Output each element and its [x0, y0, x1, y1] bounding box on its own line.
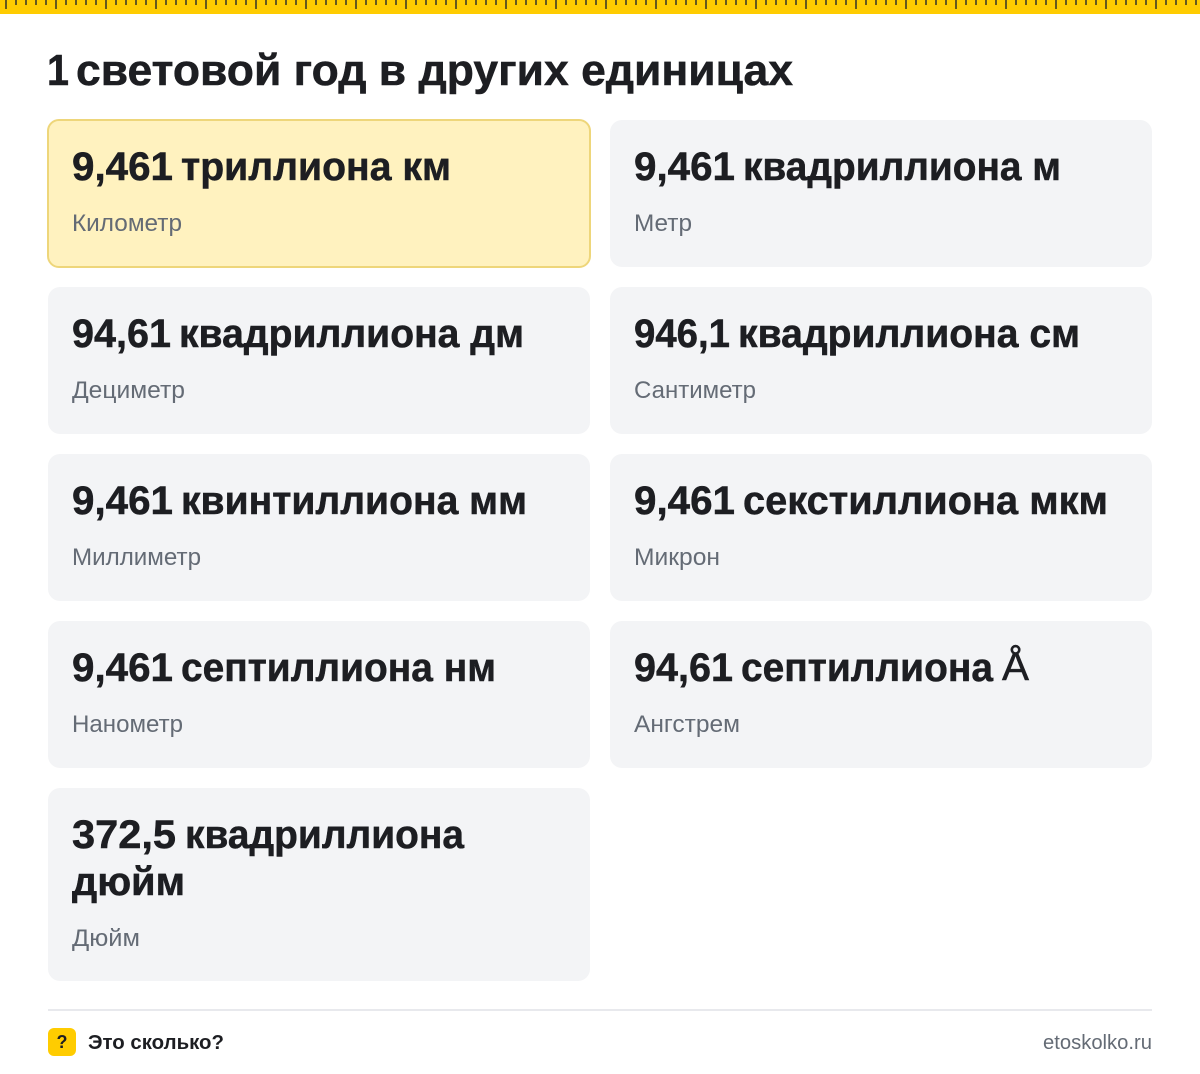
card: decimetre: 94,61 [72, 312, 171, 356]
card: metre [610, 120, 1152, 267]
card: kilometre: Километр [72, 210, 182, 237]
card: metre: квадриллиона м [743, 145, 1061, 189]
card: centimetre: квадриллиона см [738, 312, 1080, 356]
card: kilometre: 9,461 [72, 145, 173, 189]
card: angstrom: 94,61 [634, 646, 733, 690]
card: millimetre [48, 454, 590, 601]
card: angstrom: Å [1002, 644, 1029, 689]
card: nanometre: 9,461 [72, 646, 173, 690]
card: micron: Микрон [634, 544, 720, 571]
card: micron: секстиллиона мкм [743, 479, 1108, 523]
card: micron [610, 454, 1152, 601]
card: angstrom [610, 621, 1152, 768]
card: inch: Дюйм [72, 925, 140, 952]
card: inch: квадриллиона [185, 813, 465, 857]
title: световой год в других единицах [76, 46, 794, 95]
title: 1 [47, 46, 69, 95]
card: kilometre [48, 120, 590, 267]
card: centimetre: Сантиметр [634, 377, 756, 404]
card: centimetre [610, 287, 1152, 434]
card: nanometre: Нанометр [72, 711, 183, 738]
footer logo [48, 1028, 76, 1056]
card: millimetre: 9,461 [72, 479, 173, 523]
card: nanometre: септиллиона нм [181, 646, 496, 690]
card: decimetre: квадриллиона дм [179, 312, 524, 356]
card: inch [48, 788, 590, 981]
card: millimetre: Миллиметр [72, 544, 201, 571]
ruler strip [0, 0, 1200, 14]
card: centimetre: 946,1 [634, 312, 730, 356]
card: micron: 9,461 [634, 479, 735, 523]
card: inch: дюйм [72, 860, 185, 904]
card: decimetre [48, 287, 590, 434]
card: millimetre: квинтиллиона мм [181, 479, 527, 523]
card: inch: 372,5 [72, 813, 176, 857]
footer website: etoskolko.ru [1043, 1032, 1152, 1054]
card: angstrom: септиллиона [741, 646, 994, 690]
card: nanometre [48, 621, 590, 768]
card: metre: Метр [634, 210, 692, 237]
footer brand name: Это сколько? [88, 1032, 224, 1054]
card: decimetre: Дециметр [72, 377, 185, 404]
card: angstrom: Ангстрем [634, 711, 740, 738]
card: metre: 9,461 [634, 145, 735, 189]
footer logo: ? [56, 1032, 68, 1052]
card: kilometre: триллиона км [181, 145, 451, 189]
